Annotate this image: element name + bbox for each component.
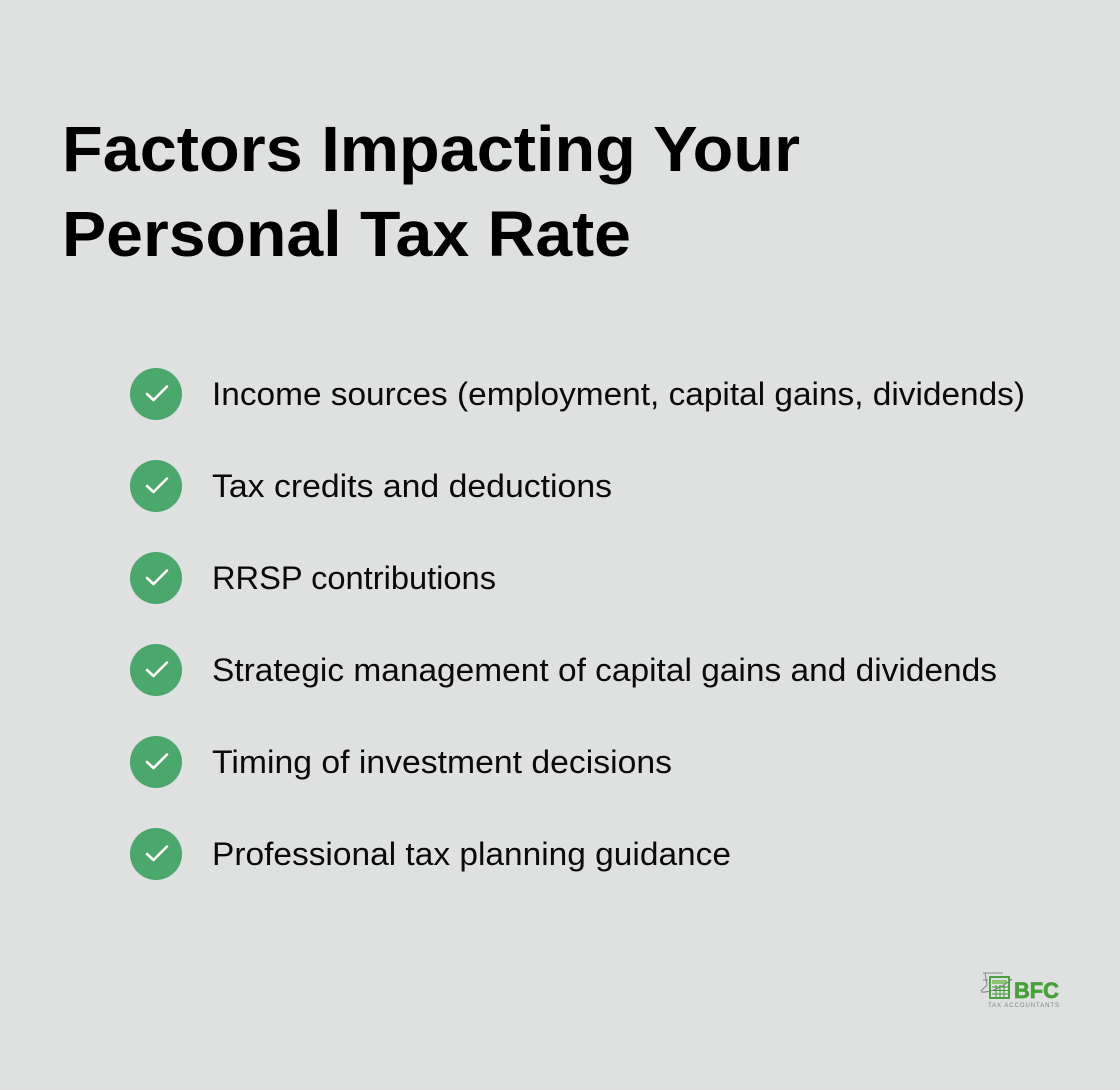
icon: calculator (981, 973, 1012, 998)
item: income sources: Income sources (employment, capital gains, dividends) (212, 376, 1025, 412)
item: tax credits: Tax credits and deductions (212, 468, 612, 504)
item: timing: Timing of investment decisions (212, 744, 672, 780)
item: tax credits (130, 460, 612, 512)
item: income sources (130, 368, 1025, 420)
logo: BFC Tax Accountants (981, 973, 1059, 1009)
item: strategic management (130, 644, 997, 696)
item: RRSP: RRSP contributions (212, 560, 496, 596)
item: professional guidance: Professional tax planning guidance (212, 836, 731, 872)
logo tagline: TAX ACCOUNTANTS (988, 1003, 1059, 1009)
item: RRSP (130, 552, 496, 604)
item: strategic management: Strategic management of capital gains and dividends (212, 652, 997, 688)
logo wordmark: BFC (1014, 978, 1059, 1003)
title: Factors Impacting Your (62, 113, 800, 185)
title: Personal Tax Rate (62, 198, 631, 270)
item: professional guidance (130, 828, 731, 880)
item: timing (130, 736, 672, 788)
checklist (130, 368, 1025, 880)
title (62, 113, 800, 270)
